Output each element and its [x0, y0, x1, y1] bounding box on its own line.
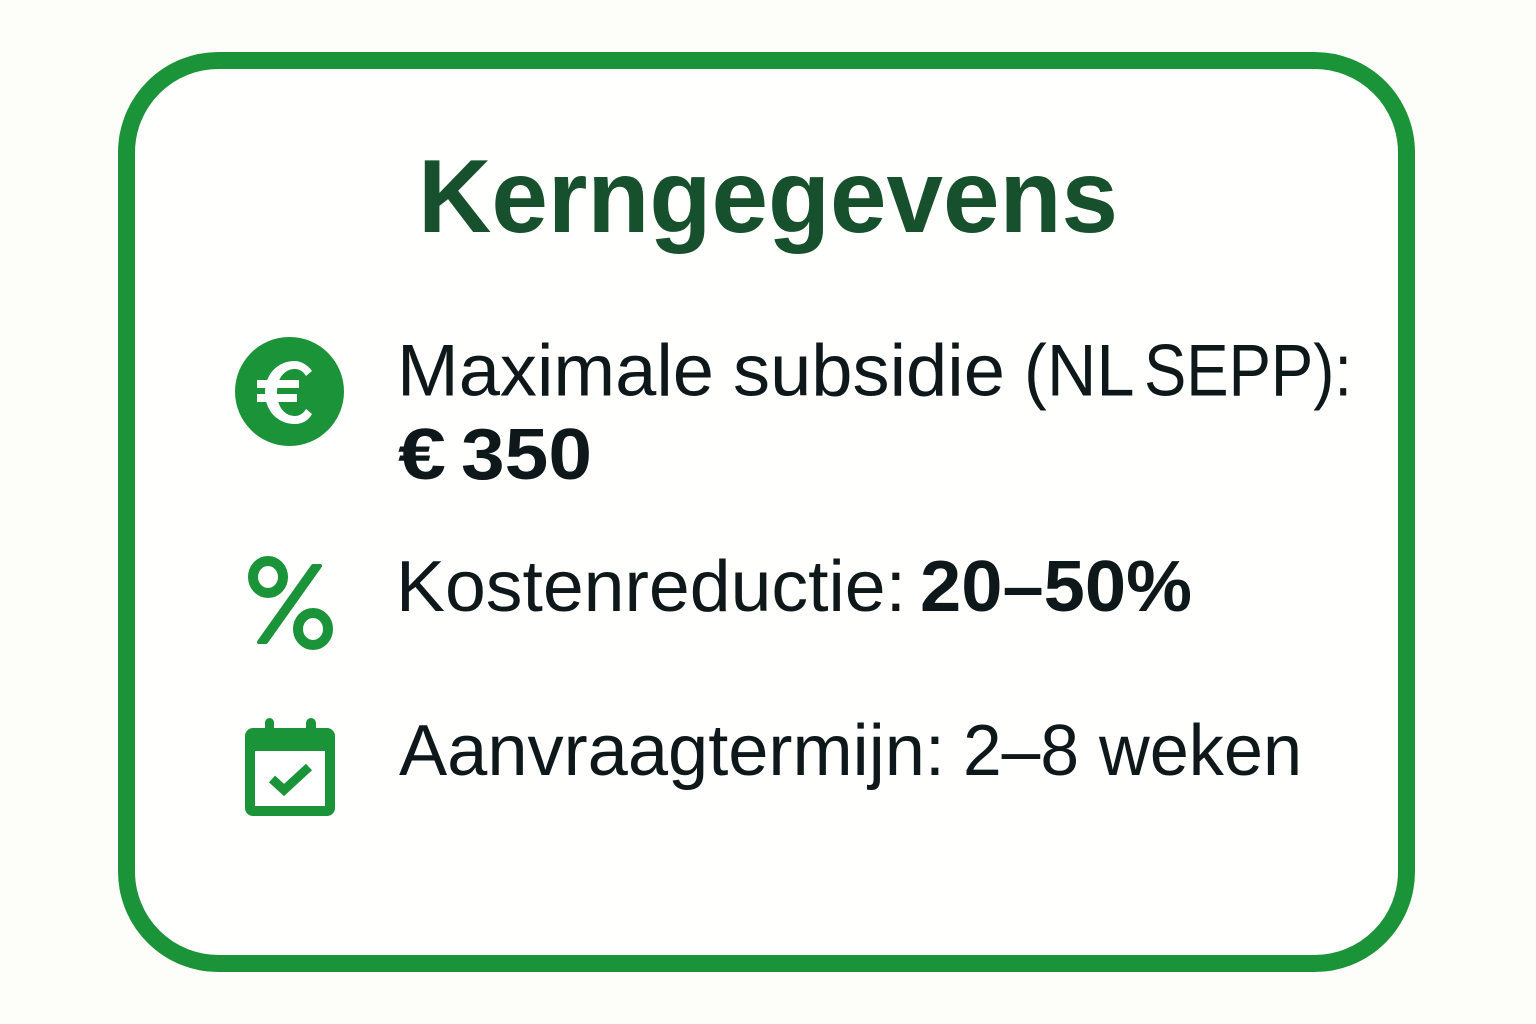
text: maximum subsidy value: 350	[461, 415, 592, 495]
text: cost reduction label: Kostenreductie:	[396, 547, 906, 627]
text: maximum subsidy value: €	[398, 415, 446, 495]
text: application period: 2–8	[963, 711, 1079, 791]
row: cost reduction	[253, 547, 1192, 645]
text: maximum subsidy label: SEPP):	[1144, 330, 1352, 412]
icon: calendar with check	[245, 718, 335, 816]
text: application period: weken	[1098, 711, 1302, 791]
row: maximum subsidy	[235, 330, 1352, 495]
title: Kerngegevens	[418, 139, 1118, 255]
icon: euro coin	[235, 337, 344, 446]
text: maximum subsidy label: Maximale	[397, 330, 714, 412]
text: cost reduction value: 20–50%	[920, 547, 1192, 627]
text: maximum subsidy label: subsidie	[733, 330, 1005, 412]
text: application period: Aanvraagtermijn:	[399, 711, 945, 791]
panel: card frame	[126, 60, 1406, 964]
text: maximum subsidy label: (NL	[1024, 330, 1133, 412]
icon: percent	[253, 561, 328, 645]
row: application period	[245, 711, 1302, 816]
